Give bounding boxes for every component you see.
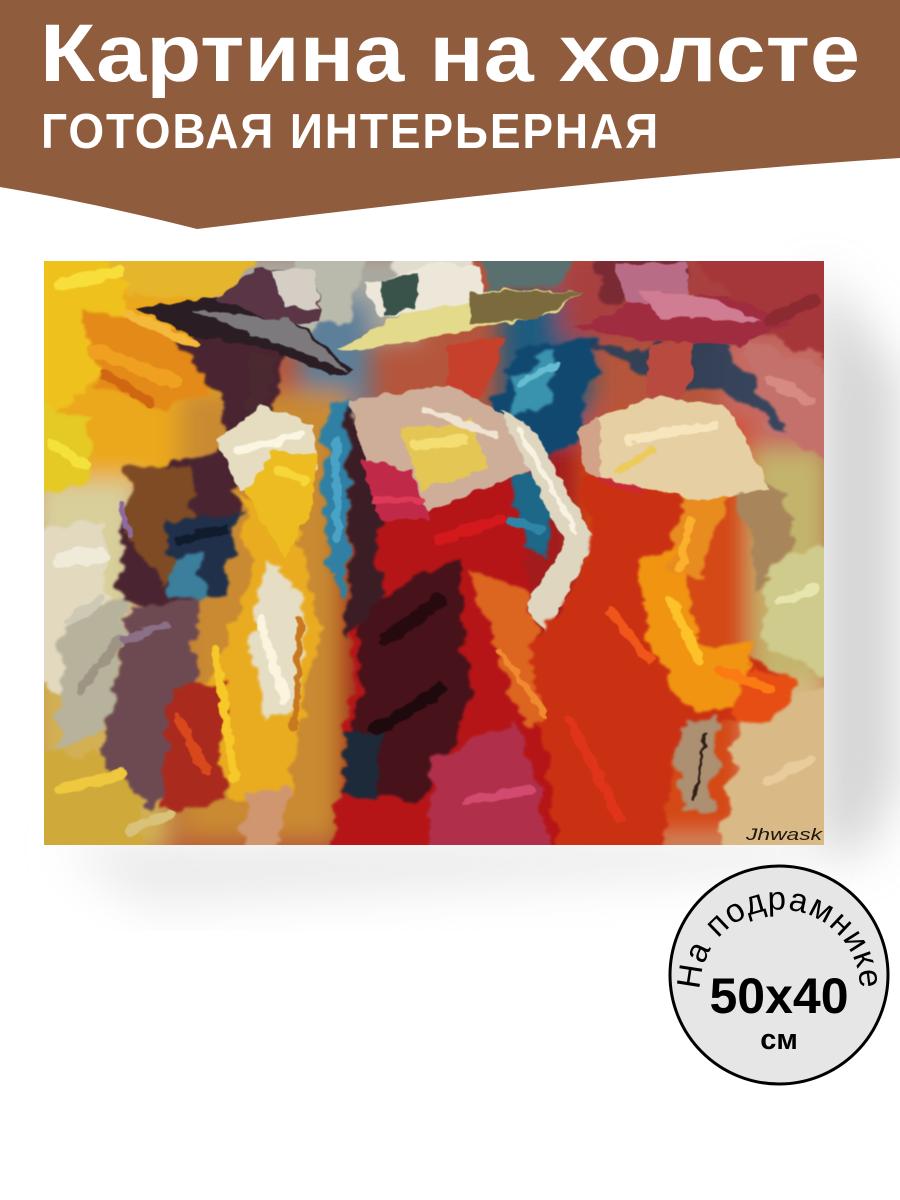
badge: canvas size on stretcher xyxy=(668,864,890,1086)
left woman bodice xyxy=(215,405,318,560)
right woman xyxy=(530,470,795,860)
painting: three women in hats xyxy=(30,250,840,860)
middle woman torso and arm xyxy=(350,335,595,635)
painting signature: Jhwask xyxy=(745,825,824,844)
canvas drop shadow xyxy=(60,270,900,905)
background brush strokes xyxy=(30,250,840,860)
right woman torso xyxy=(575,340,770,500)
badge: canvas size on stretcher: см xyxy=(760,1024,798,1056)
painting background colour fields xyxy=(30,250,840,855)
header banner xyxy=(0,0,900,229)
palette knife strokes xyxy=(52,272,815,830)
middle woman xyxy=(328,404,560,845)
left hat xyxy=(135,268,355,376)
badge: canvas size on stretcher: 50x40 xyxy=(709,968,849,1024)
left woman xyxy=(100,330,320,860)
badge: canvas size on stretcher: На подрамнике xyxy=(677,892,878,987)
right hat xyxy=(575,262,790,345)
title: Картина на холсте xyxy=(40,8,860,99)
subtitle: ГОТОВАЯ ИНТЕРЬЕРНАЯ xyxy=(41,105,660,159)
middle hat xyxy=(338,262,582,350)
